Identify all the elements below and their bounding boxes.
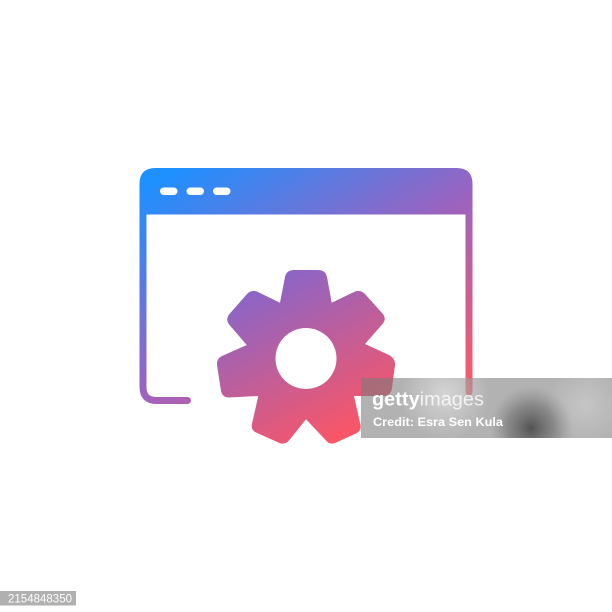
watermark credit text: Credit: Esra Sen Kula: [373, 415, 503, 429]
browser window icon: [140, 168, 472, 400]
watermark logo text: gettyimages: [372, 388, 484, 410]
image id label: [0, 591, 76, 606]
window frame outline: [143, 214, 469, 400]
watermark background: [361, 378, 612, 438]
icon: settings gear: [217, 270, 395, 444]
window control dots: [160, 188, 230, 195]
image id label: 2154848350: [8, 594, 72, 606]
watermark banner: [361, 378, 612, 438]
window header bar: [140, 168, 472, 214]
